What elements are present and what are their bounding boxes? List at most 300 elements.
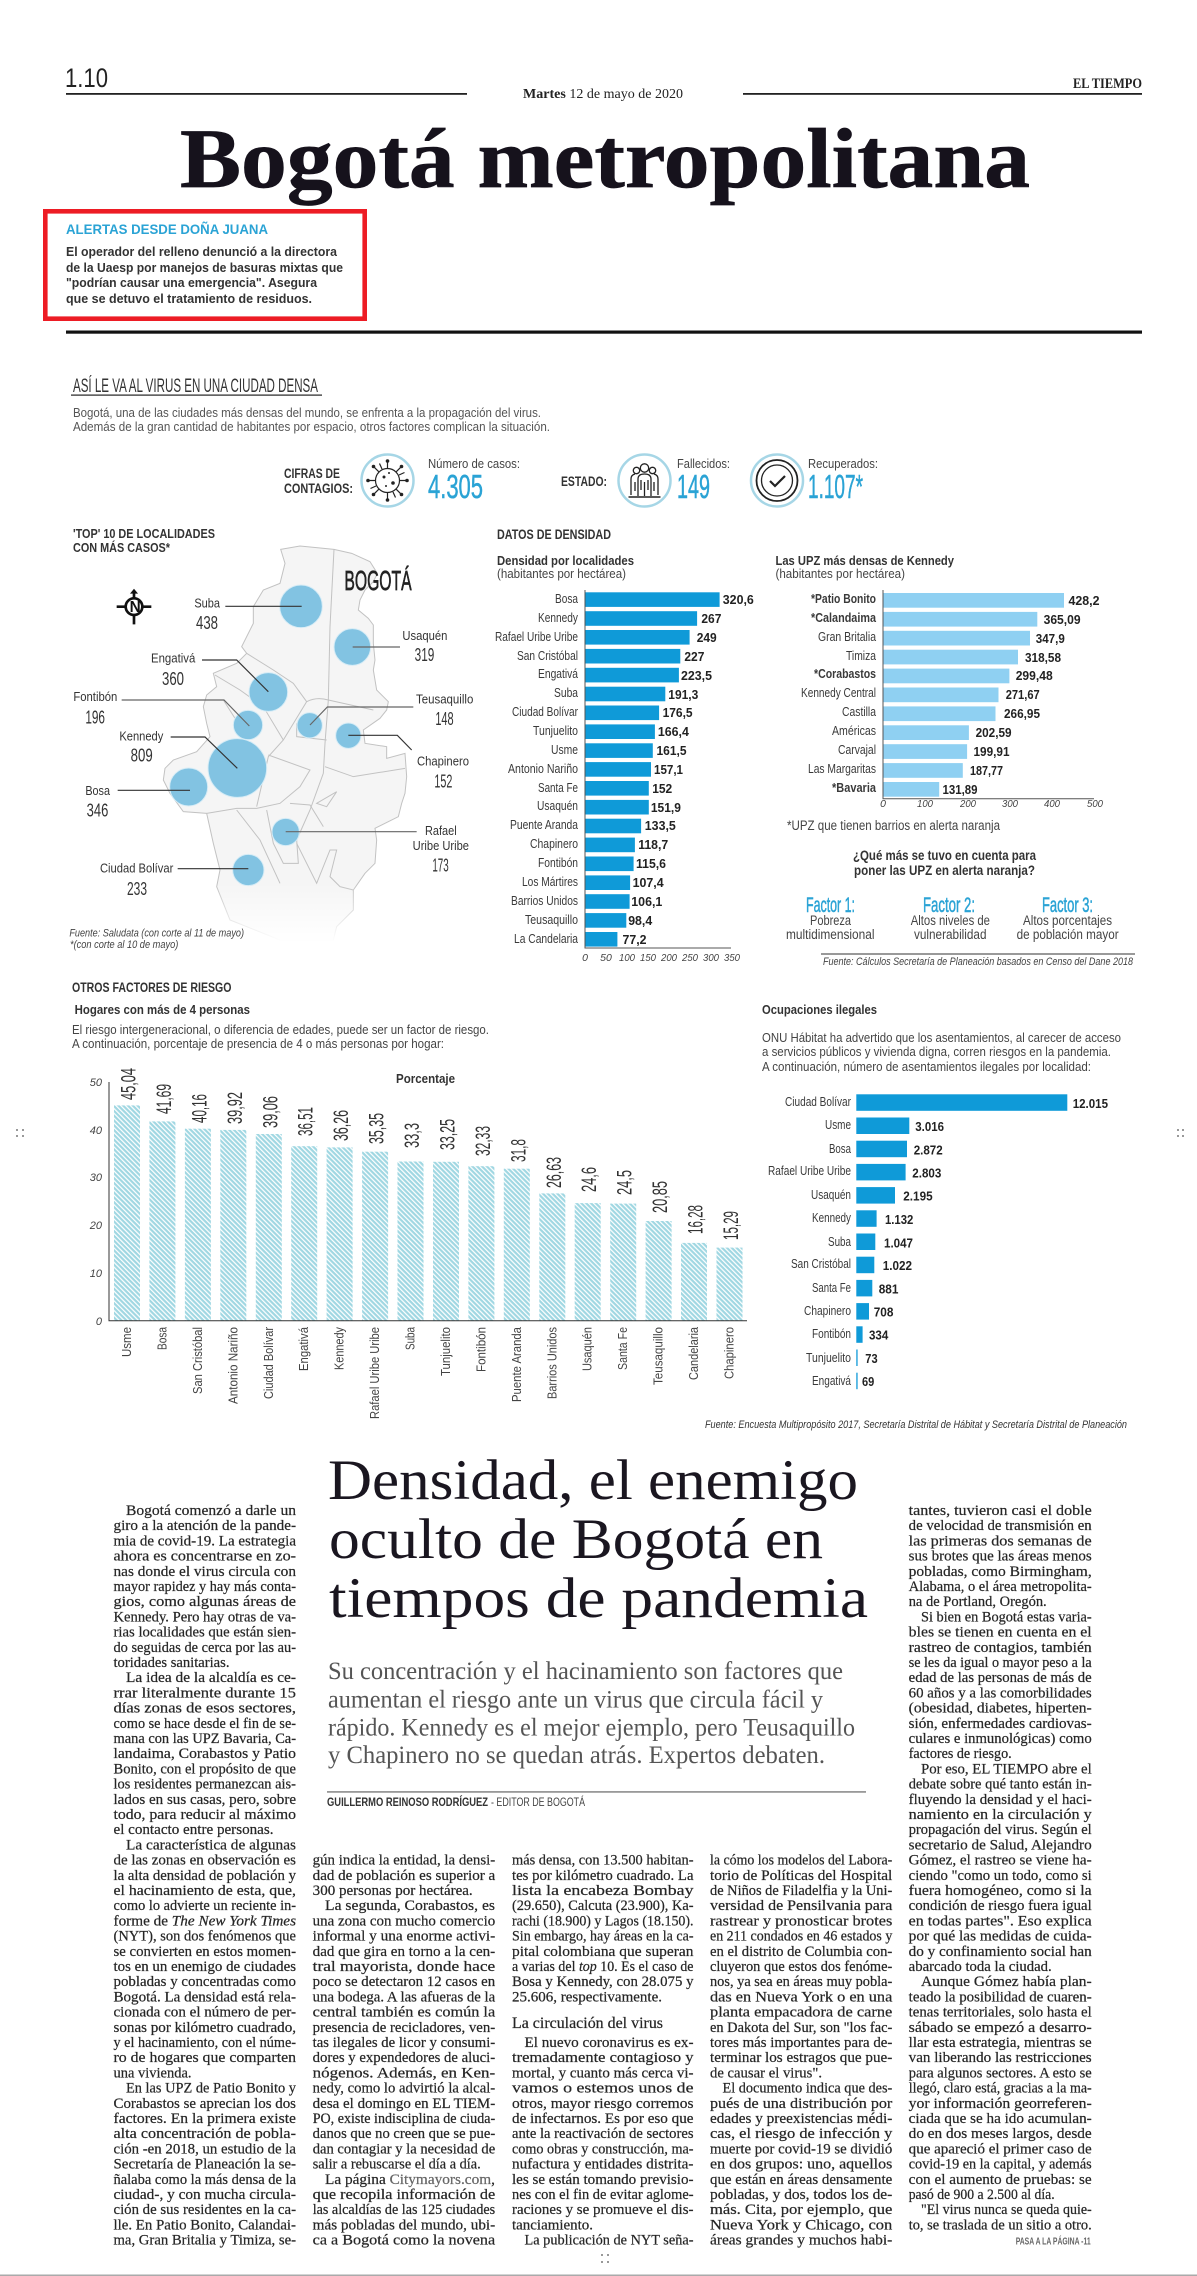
article column 4: de Niños de Filadelfia y la Uni- [710, 1883, 892, 1899]
bars [883, 593, 1064, 797]
callout: Alertas desde Doña Juana: "podrían causar una emergencia". Asegura [66, 275, 318, 290]
article column 5: pobladas, como Birmingham, [909, 1564, 1092, 1580]
article column 5: do y confinamiento social han [909, 1944, 1092, 1960]
map outline and boundaries [163, 546, 407, 940]
column values: 36,26 [330, 1110, 353, 1141]
axis ticks: 100 [917, 798, 933, 810]
article column 1: lle. En Patio Bonito, Calandai- [114, 2217, 296, 2233]
article column 2: dan contagiar y la necesidad de [313, 2141, 495, 2157]
map labels: 346 [87, 800, 108, 821]
category labels: Usaquén [811, 1187, 851, 1202]
article column 1: y el hacinamiento, con el núme- [114, 2035, 296, 2051]
values [622, 593, 754, 947]
article column 3: raciones y se promueve el dis- [512, 2202, 694, 2218]
category labels: Kennedy Central [801, 685, 876, 700]
stats row: cifras de contagios and estado: Número de casos: [428, 456, 520, 471]
source: density: Fuente: Cálculos Secretaría de Planeación basados en Censo del Dane 2018 [823, 956, 1134, 968]
title: Bogotá metropolitana [180, 112, 1030, 206]
stats row: cifras de contagios and estado: 149 [677, 468, 710, 505]
article column 2: dad que gira en torno a la cen- [313, 1944, 495, 1960]
axis ticks: 500 [1087, 798, 1103, 810]
values: 161,5 [656, 744, 687, 758]
article column 4: das en Nueva York o en una [710, 1989, 893, 2005]
category labels: *Corabastos [814, 666, 876, 681]
article column 3 [512, 1853, 694, 2249]
article column 4: terminar los estragos que pue- [710, 2050, 892, 2066]
values: 347,9 [1036, 632, 1065, 646]
category labels: Teusaquillo [525, 912, 578, 927]
icon: north compass: N [130, 599, 141, 616]
values: 249 [697, 631, 717, 645]
map labels: Usaquén [402, 628, 447, 643]
y axis ticks: 0 [96, 1316, 103, 1328]
page header: folio, date and brand: 1.10 [65, 63, 108, 93]
article column 1: Secretaría de Planeación la se- [114, 2157, 296, 2173]
callout: Alertas desde Doña Juana: de la Uaesp por manejos de basuras mixtas que [66, 260, 343, 275]
bars [856, 1094, 1067, 1389]
map labels: Bosa [85, 783, 110, 798]
article column 1: La idea de la alcaldía es ce- [126, 1670, 296, 1686]
axis ticks: 150 [640, 952, 656, 964]
category labels: La Candelaria [514, 931, 579, 946]
y axis ticks: 50 [90, 1077, 103, 1089]
values: 428,2 [1068, 594, 1100, 608]
factors panel: de población mayor [1017, 927, 1119, 942]
column values: 31,8 [507, 1139, 530, 1162]
values: 267 [701, 612, 721, 626]
map title: BOGOTÁ [344, 565, 412, 596]
map labels: 148 [435, 708, 454, 729]
article column 1: giro a la atención de la pande- [114, 1518, 296, 1534]
article column 1: ma, Gran Britalia y Timiza, se- [114, 2233, 296, 2249]
article column 4: pués de una distribución por [710, 2096, 892, 2112]
column categories: Candelaria [686, 1326, 701, 1380]
article column 3: les se están tomando previsio- [512, 2172, 694, 2188]
column categories: Tunjuelito [438, 1327, 453, 1376]
stats row: cifras de contagios and estado: 4.305 [428, 468, 483, 505]
article column 3: Bosa y Kennedy, con 28.075 y [512, 1974, 694, 1990]
category labels: Chapinero [804, 1303, 851, 1318]
article column 1: como lo advierte un reciente in- [114, 1898, 296, 1914]
map labels: 152 [434, 770, 452, 791]
article column 3: como obras y construcción, ma- [512, 2141, 694, 2157]
y axis ticks: 20 [89, 1220, 103, 1232]
article column 5: van liberando las restricciones [909, 2050, 1092, 2066]
article column 5: secretario de Salud, Alejandro [909, 1837, 1092, 1853]
article column 3: mortal, y cuanto más cerca vi- [512, 2065, 694, 2081]
article column 4 [710, 1853, 893, 2249]
axis ticks: 250 [681, 952, 698, 964]
article column 5: rastreo de contagios, también [909, 1640, 1092, 1656]
byline: - EDITOR DE BOGOTÁ [491, 1796, 585, 1809]
article column 1: tos en un enemigo de ciudades [114, 1959, 296, 1975]
article deck: aumentan el riesgo ante un virus que circula fácil y [328, 1686, 823, 1714]
values: 202,59 [976, 726, 1012, 740]
article column 2: presencia de recicladores, ven- [313, 2020, 495, 2036]
article column 4: en 211 condados en 46 estados y [710, 1929, 893, 1945]
article column 5: condición de riesgo fuera igual [909, 1898, 1092, 1914]
axis ticks [582, 952, 740, 964]
article column 1: rrar literalmente durante 15 [114, 1685, 296, 1701]
byline: GUILLERMO REINOSO RODRÍGUEZ [327, 1796, 488, 1809]
factors panel: Altos niveles de [911, 913, 990, 928]
article column 1: Bonito, con el propósito de que [114, 1761, 296, 1777]
article column 5: yor información georreferen- [909, 2096, 1092, 2112]
category labels: Rafael Uribe Uribe [495, 629, 578, 644]
article column 2: La segunda, Corabastos, es [325, 1898, 495, 1914]
article column 5 [909, 1503, 1092, 2233]
article column 5: sábado se empezó a desarro- [909, 2020, 1092, 2036]
bars [585, 592, 720, 947]
article column 2: desa el domingo en EL TIEM- [313, 2096, 495, 2112]
article column 5: to, se traslada de un sitio a otro. [909, 2217, 1092, 2233]
column values [118, 1068, 743, 1240]
callout: Alertas desde Doña Juana: que se detuvo el tratamiento de residuos. [66, 291, 312, 306]
category labels: Antonio Nariño [508, 761, 578, 776]
article column 2: 300 personas por hectárea. [313, 1883, 473, 1899]
article column 1: toridades sanitarias. [114, 1655, 230, 1671]
article column 2: dad de población es superior a [313, 1868, 496, 1884]
values: 166,4 [658, 725, 689, 739]
stats row: cifras de contagios and estado: Recuperados: [808, 456, 878, 471]
factors panel: Factor 1: [806, 894, 855, 917]
article column 3: tanciamiento. [512, 2217, 593, 2233]
values: 118,7 [638, 838, 668, 852]
factors panel: poner las UPZ en alerta naranja? [854, 863, 1035, 878]
map labels: Ciudad Bolívar [100, 860, 174, 875]
category labels: Puente Aranda [510, 817, 579, 832]
category labels: Usaquén [537, 798, 578, 813]
risk heading: Hogares con más de 4 personas [75, 1002, 250, 1017]
risk heading: OTROS FACTORES DE RIESGO [72, 980, 232, 995]
footnote: UPZ alerta naranja: *UPZ que tienen barrios en alerta naranja [787, 818, 1000, 833]
axis ticks: 300 [703, 952, 719, 964]
values: 227 [684, 650, 704, 664]
values: 2.195 [903, 1190, 933, 1204]
y axis ticks: 40 [90, 1125, 103, 1137]
column categories: Bosa [154, 1326, 169, 1350]
category labels: Las Margaritas [808, 761, 876, 776]
article column 4: más. Cita, por ejemplo, que [710, 2202, 892, 2218]
article column 3: La publicación de NYT seña- [524, 2233, 694, 2249]
article column 4: en Dakota del Sur, son "los fac- [710, 2020, 892, 2036]
column values: 15,29 [720, 1211, 743, 1240]
risk heading: El riesgo intergeneracional, o diferencia de edades, puede ser un factor de riesgo. [72, 1022, 489, 1037]
article column 5: para algunos sectores. A esto se [909, 2065, 1092, 2081]
article column 5: debate sobre qué tanto están in- [909, 1777, 1092, 1793]
column values: 24,5 [614, 1170, 637, 1195]
article column 2: ca a Bogotá como la novena [313, 2233, 496, 2249]
intro text [73, 405, 550, 434]
article column 5: teado la posibilidad de cuaren- [909, 1989, 1092, 2005]
article column 4: tores más importantes para de- [710, 2035, 892, 2051]
article column 1: nas donde el virus circula con [114, 1564, 297, 1580]
map source: Fuente: Saludata (con corte al 11 de mayo) [69, 928, 244, 940]
article column 1: el contacto entre personas. [114, 1822, 274, 1838]
stats row: cifras de contagios and estado: CIFRAS DE [284, 466, 340, 481]
column categories [119, 1326, 736, 1419]
category labels [495, 591, 579, 946]
article column 5: las primeras dos semanas de [909, 1533, 1092, 1549]
article deck: rápido. Kennedy es el mejor ejemplo, pero Teusaquillo [328, 1714, 855, 1742]
article column 1: Bogotá comenzó a darle un [126, 1503, 297, 1519]
article column 2: danos que no creen que se pue- [313, 2126, 495, 2142]
category labels: Barrios Unidos [511, 893, 578, 908]
article column 1 [114, 1503, 297, 2249]
category labels: Usme [825, 1117, 851, 1132]
article column 5: fluyendo la densidad y el haci- [909, 1792, 1092, 1808]
illegal occupations text: ONU Hábitat ha advertido que los asentamientos, al carecer de acceso [762, 1030, 1121, 1045]
article column 2: una bodega. A las afueras de la [313, 1989, 496, 2005]
map heading [73, 526, 215, 555]
hatched columns [114, 1105, 742, 1321]
column categories: Chapinero [722, 1327, 736, 1379]
article column 5: Por eso, EL TIEMPO abre el [921, 1761, 1092, 1777]
article column 1: el hacinamiento de esta, que, [114, 1883, 296, 1899]
axis ticks [880, 798, 1103, 810]
article column 5: Gómez, el rastreo se viene ha- [909, 1853, 1092, 1869]
density heading: DATOS DE DENSIDAD [497, 527, 611, 542]
category labels: Tunjuelito [806, 1350, 851, 1365]
article column 5: se les da igual o mayor peso a la [909, 1655, 1092, 1671]
bar chart: densidad por localidades [495, 553, 754, 964]
article column 3: a varias del top 10. Es el caso de [512, 1959, 694, 1975]
risk heading: A continuación, porcentaje de presencia de 4 o más personas por hogar: [72, 1036, 444, 1051]
article column 1: mana con las UPZ Bavaria, Ca- [114, 1731, 296, 1747]
callout: Alertas desde Doña Juana: ALERTAS DESDE DOÑA JUANA [66, 220, 268, 237]
axis ticks: 100 [619, 952, 635, 964]
values: 151,9 [651, 801, 681, 815]
values: 334 [869, 1328, 888, 1342]
category labels [801, 591, 877, 795]
values: 152 [652, 782, 672, 796]
factors panel: ¿Qué más se tuvo en cuenta para [853, 848, 1036, 863]
page header: folio, date and brand [65, 63, 1142, 101]
axis ticks: 350 [724, 952, 740, 964]
article column 5: por qué las medidas de cuida- [909, 1929, 1092, 1945]
column values: 24,6 [578, 1167, 601, 1192]
article column 2: tral mayorista, donde hace [313, 1959, 495, 1975]
column values: 20,85 [649, 1181, 672, 1213]
illegal occupations text [762, 1002, 1121, 1074]
column categories: Kennedy [332, 1327, 347, 1370]
category labels: Rafael Uribe Uribe [768, 1163, 851, 1178]
column values: 35,35 [366, 1113, 389, 1144]
article column 3: de infectarnos. Es por eso que [512, 2111, 694, 2127]
article column 2: dores y expendedores de aluci- [313, 2050, 495, 2066]
category labels: Gran Britalia [818, 629, 877, 644]
category labels: Engativá [812, 1373, 852, 1388]
column categories: Rafael Uribe Uribe [367, 1327, 382, 1419]
values: 176,5 [663, 706, 693, 720]
column values: 41,69 [153, 1084, 176, 1114]
map labels: Suba [194, 596, 220, 611]
values: 98,4 [628, 914, 652, 928]
article column 4: muerte por covid-19 se dividió [710, 2141, 892, 2157]
column chart: porcentaje de hogares: Porcentaje [396, 1071, 455, 1086]
column categories: Teusaquillo [651, 1327, 666, 1385]
column categories: Puente Aranda [509, 1326, 524, 1402]
article column 3: vamos o estemos unos de [512, 2081, 694, 2097]
category labels: *Bavaria [832, 780, 877, 795]
category labels [768, 1094, 852, 1388]
values: 157,1 [654, 763, 683, 777]
column categories: Santa Fe [615, 1327, 630, 1370]
article column 1: cionada con el número de per- [114, 2005, 296, 2021]
category labels: Tunjuelito [533, 723, 578, 738]
page header: folio, date and brand: EL TIEMPO [1073, 76, 1142, 92]
article column 1: do seguidas de cerca por las au- [114, 1640, 296, 1656]
article column 1: mayor rapidez y hay más conta- [114, 1579, 296, 1595]
column values: 32,33 [472, 1126, 495, 1156]
column values: 39,06 [259, 1096, 282, 1128]
article column 2: PO, existe indisciplina de ciuda- [313, 2111, 495, 2127]
article column 1: En las UPZ de Patio Bonito y [126, 2081, 297, 2097]
article column 1: todo, para reducir al máximo [114, 1807, 296, 1823]
category labels: San Cristóbal [517, 648, 578, 663]
factors panel [786, 848, 1119, 942]
article column 1: (NYT), son dos fenómenos que [114, 1929, 296, 1945]
risk heading [72, 980, 489, 1051]
article column 2: que recopila información de [313, 2187, 495, 2203]
stats row: cifras de contagios and estado: CONTAGIOS: [284, 481, 353, 496]
article column 5: pasó de 900 a 2.500 al día. [909, 2187, 1055, 2203]
bar chart: asentamientos ilegales [768, 1094, 1108, 1389]
article column 1: se convierten en estos momen- [114, 1944, 296, 1960]
article column 4: torio de Políticas del Hospital [710, 1868, 892, 1884]
category labels: Bosa [555, 591, 579, 606]
article column 5: (obesidad, diabetes, hiperten- [909, 1701, 1092, 1717]
category labels: Bosa [829, 1141, 852, 1156]
stats row: cifras de contagios and estado: Fallecidos: [677, 456, 730, 471]
article column 4: en dos grupos: uno, aquellos [710, 2157, 893, 2173]
article column 5: de velocidad de transmisión en [909, 1518, 1092, 1534]
factors panel: vulnerabilidad [914, 927, 986, 942]
category labels: Américas [832, 723, 876, 738]
bar chart: densidad por localidades: (habitantes por hectárea) [497, 566, 626, 581]
map labels: Engativá [151, 650, 196, 665]
values: 115,6 [636, 857, 666, 871]
article column 1: landaima, Corabastos y Patio [114, 1746, 296, 1762]
bar chart: densidad por localidades: Densidad por localidades [497, 553, 634, 568]
article column 1: los residentes permanezcan ais- [114, 1777, 296, 1793]
y axis ticks: 10 [90, 1268, 103, 1280]
axis ticks: 50 [600, 952, 612, 964]
category labels: Usme [551, 742, 578, 757]
article column 2 [313, 1853, 496, 2249]
article column 4: planta empacadora de carne [710, 2005, 892, 2021]
column categories: San Cristóbal [190, 1327, 205, 1394]
article column 4: El documento indica que des- [722, 2081, 892, 2097]
values [942, 594, 1100, 797]
article column 5: sión, enfermedades cardiovas- [909, 1716, 1092, 1732]
category labels: Timiza [846, 648, 877, 663]
column values: 36,51 [295, 1107, 318, 1136]
column categories: Usaquén [580, 1327, 595, 1371]
article column 1: ciudad-, y con mucha circula- [114, 2187, 296, 2203]
article column 1: Kennedy. Pero hay otras de va- [114, 1609, 296, 1625]
axis ticks: 0 [880, 798, 886, 810]
article column 2: informal y una enorme activi- [313, 1929, 495, 1945]
category labels: Ciudad Bolívar [512, 704, 579, 719]
map labels: 173 [432, 855, 449, 876]
values: 1.132 [885, 1213, 913, 1227]
column categories: Ciudad Bolívar [261, 1326, 276, 1399]
article column 5: ciendo "como un todo, como si [909, 1868, 1092, 1884]
bar chart: UPZ más densas de Kennedy: Las UPZ más densas de Kennedy [776, 553, 955, 568]
factors panel: Altos porcentajes [1023, 913, 1112, 928]
map labels: Kennedy [119, 729, 164, 744]
stats row: cifras de contagios and estado: 1.107* [808, 468, 863, 505]
intro text: Además de la gran cantidad de habitantes por espacio, otros factores complican la situación. [73, 419, 550, 434]
article column 5: Alabama, o el área metropolita- [909, 1579, 1092, 1595]
values: 106,1 [631, 895, 662, 909]
article column 2: salir a rebuscarse el día a día. [313, 2157, 481, 2173]
column categories: Fontibón [473, 1327, 488, 1372]
axis ticks: 0 [582, 952, 588, 964]
y axis ticks: 30 [90, 1172, 103, 1184]
article column 3: Sin embargo, hay áreas en la ca- [512, 1929, 694, 1945]
article column 5: do en dos meses largos, desde [909, 2126, 1092, 2142]
article column 2: gún indica la entidad, la densi- [313, 1853, 495, 1869]
article column 2: nógenos. Además, en Ken- [313, 2065, 495, 2081]
icon: north compass [117, 589, 151, 624]
article column 4: áreas grandes y muchos habi- [710, 2233, 892, 2249]
article column 1: rias localidades que están sien- [114, 1625, 296, 1641]
article deck: Su concentración y el hacinamiento son factores que [328, 1658, 843, 1685]
axis ticks: 200 [959, 798, 976, 810]
column chart: porcentaje de hogares [89, 1068, 747, 1419]
icon: group of people [618, 454, 670, 506]
article column 1: como se hace desde el fin de se- [114, 1716, 296, 1732]
column values: 26,63 [543, 1157, 566, 1188]
article column 2: más pobladas del mundo, ubi- [313, 2217, 495, 2233]
column categories: Barrios Unidos [544, 1327, 559, 1399]
map: Bogotá localities with case bubbles [69, 546, 473, 951]
article column 5: tantes, tuvieron casi el doble [909, 1503, 1092, 1519]
article column 5: covid-19 en la capital, y además [909, 2157, 1092, 2173]
article column 2: nedy, como lo advirtió la alcal- [313, 2081, 495, 2097]
article column 2: central también es común la [313, 2005, 496, 2021]
category labels: Fontibón [812, 1326, 851, 1341]
article column 1: ahora es concentrarse en zo- [114, 1549, 296, 1565]
illegal occupations text: a servicios públicos y vivienda digna, corren riesgos en la pandemia. [762, 1044, 1111, 1059]
article headline: tiempos de pandemia [329, 1567, 868, 1630]
values: 12.015 [1073, 1097, 1108, 1111]
values: 266,95 [1004, 707, 1040, 721]
values: 3.016 [915, 1120, 944, 1134]
column categories: Engativá [296, 1326, 311, 1371]
section heading: ASÍ LE VA AL VIRUS EN UNA CIUDAD DENSA [73, 376, 318, 397]
column values: 45,04 [118, 1068, 140, 1100]
map labels: 196 [85, 706, 105, 727]
values: 69 [862, 1375, 874, 1389]
article column 4: rastrear y pronosticar brotes [710, 1913, 893, 1929]
axis ticks: 400 [1044, 798, 1060, 810]
article column 3: (29.650), Calcuta (23.900), Ka- [512, 1898, 694, 1914]
map labels: 319 [415, 644, 434, 665]
article column 1: la alta densidad de población y [114, 1868, 297, 1884]
article column 4: en el distrito de Columbia con- [710, 1944, 892, 1960]
category labels: Santa Fe [538, 780, 578, 795]
category labels: Kennedy [812, 1210, 851, 1225]
article column 1: días zonas de esos sectores, [114, 1701, 296, 1717]
category labels: Santa Fe [812, 1280, 851, 1295]
article column 3: nufactura y entidades distrita- [512, 2157, 694, 2173]
category labels: Suba [554, 685, 579, 700]
values: 191,3 [668, 688, 698, 702]
article column 1: ñalaba como la más densa de la [114, 2172, 297, 2188]
